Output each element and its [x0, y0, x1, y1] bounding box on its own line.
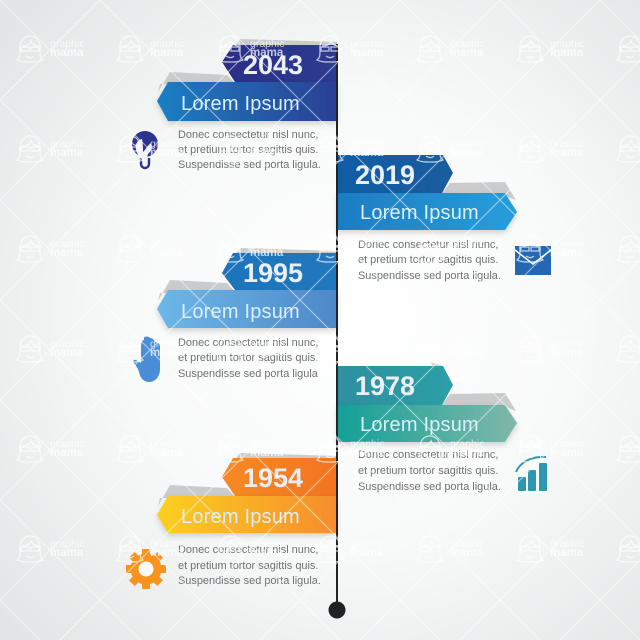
body text	[358, 449, 501, 493]
watermark overlay: graphic	[350, 338, 384, 350]
watermark overlay: mama	[450, 547, 484, 559]
year tab 2019	[337, 155, 453, 193]
watermark overlay: graphic	[350, 438, 384, 450]
watermark overlay: graphic	[550, 438, 584, 450]
icon: gear	[126, 549, 166, 589]
label bar	[157, 82, 337, 121]
body text: et pretium tortor sagittis quis.	[358, 465, 498, 477]
watermark overlay: graphic	[50, 38, 84, 50]
icon: bar chart	[516, 457, 547, 491]
label bar	[157, 290, 337, 328]
watermark overlay: graphic	[550, 238, 584, 250]
watermark overlay: graphic	[550, 338, 584, 350]
watermark overlay: mama	[350, 147, 384, 159]
watermark overlay: mama	[450, 47, 484, 59]
label: Lorem Ipsum	[360, 202, 479, 224]
watermark overlay: mama	[50, 47, 84, 59]
body text: Suspendisse sed porta ligula.	[178, 159, 321, 171]
watermark overlay: mama	[50, 247, 84, 259]
watermark overlay: graphic	[150, 38, 184, 50]
gray top edge	[430, 362, 453, 385]
body text: Suspendisse sed porta ligula.	[178, 575, 321, 587]
watermark overlay: mama	[150, 547, 184, 559]
year: 1978	[355, 371, 415, 401]
watermark overlay: mama	[150, 47, 184, 59]
watermark overlay: mama	[450, 147, 484, 159]
watermark overlay: graphic	[250, 538, 284, 550]
axis line	[336, 44, 338, 610]
body text: et pretium tortor sagittis quis.	[178, 352, 318, 364]
body text: Suspendisse sed porta ligula.	[358, 270, 501, 282]
label: Lorem Ipsum	[181, 301, 300, 323]
watermark overlay: mama	[250, 147, 284, 159]
label bar	[337, 405, 517, 442]
watermark overlay: mama	[150, 147, 184, 159]
watermark overlay: graphic	[50, 238, 84, 250]
watermark overlay: graphic	[350, 38, 384, 50]
watermark overlay: graphic	[450, 338, 484, 350]
watermark overlay: mama	[350, 447, 384, 459]
body text: Donec consectetur nisl nunc,	[358, 449, 498, 461]
icon: envelope	[515, 246, 551, 275]
watermark overlay: graphic	[50, 438, 84, 450]
watermark overlay: graphic	[150, 138, 184, 150]
watermark overlay: mama	[450, 247, 484, 259]
timeline entry: 2019	[337, 155, 551, 282]
year tab 2043	[222, 45, 337, 82]
watermark overlay: graphic	[150, 238, 184, 250]
watermark overlay: mama	[550, 247, 584, 259]
watermark overlay: graphic	[350, 238, 384, 250]
body text: Suspendisse sed porta ligula	[178, 368, 319, 380]
watermark overlay: mama	[150, 247, 184, 259]
watermark overlay: mama	[250, 247, 284, 259]
year: 1995	[243, 258, 303, 288]
watermark overlay: mama	[150, 347, 184, 359]
watermark overlay: mama	[350, 547, 384, 559]
body text: Donec consectetur nisl nunc,	[178, 337, 318, 349]
watermark overlay: mama	[450, 447, 484, 459]
watermark overlay: graphic	[150, 538, 184, 550]
watermark overlay: graphic	[550, 38, 584, 50]
watermark overlay: mama	[550, 47, 584, 59]
label: Lorem Ipsum	[181, 506, 300, 528]
body text: Donec consectetur nisl nunc,	[178, 544, 318, 556]
body text	[178, 129, 321, 171]
year: 2019	[355, 160, 415, 190]
watermark overlay: graphic	[250, 238, 284, 250]
watermark overlay: graphic	[450, 438, 484, 450]
watermark overlay: mama	[50, 347, 84, 359]
timeline entry: 1978	[337, 362, 547, 493]
gray backing shape	[442, 393, 516, 411]
watermark overlay: mama	[550, 547, 584, 559]
year tab 1954	[222, 458, 337, 496]
body text: Donec consectetur nisl nunc,	[178, 129, 318, 141]
icon: hand	[133, 336, 160, 382]
watermark overlay: graphic	[450, 538, 484, 550]
gray backing shapes	[158, 39, 337, 92]
watermark overlay: mama	[50, 547, 84, 559]
watermark overlay: mama	[550, 147, 584, 159]
timeline axis	[328, 44, 346, 618]
watermark overlay: mama	[150, 447, 184, 459]
label: Lorem Ipsum	[360, 414, 479, 436]
watermark overlay: mama	[250, 547, 284, 559]
watermark overlay: graphic	[250, 138, 284, 150]
body text: Donec consectetur nisl nunc,	[358, 239, 498, 251]
timeline entry: 1995	[133, 248, 337, 382]
watermark overlay: mama	[250, 447, 284, 459]
year tab 1995	[222, 253, 337, 290]
watermark overlay: mama	[550, 447, 584, 459]
watermark overlay: graphic	[350, 538, 384, 550]
watermark overlay: mama	[350, 47, 384, 59]
body text	[178, 337, 319, 380]
body text: et pretium tortor sagittis quis.	[178, 560, 318, 572]
timeline entry: 2043	[132, 39, 337, 171]
year: 2043	[243, 50, 303, 80]
watermark overlay: graphic	[250, 38, 284, 50]
watermark overlay: graphic	[450, 238, 484, 250]
gray backing shape	[442, 182, 516, 200]
watermark overlay: mama	[50, 147, 84, 159]
watermark overlay: graphic	[50, 538, 84, 550]
watermark overlay: graphic	[50, 138, 84, 150]
watermark overlay: graphic	[250, 438, 284, 450]
watermark overlay: graphic	[150, 338, 184, 350]
year tab 1978	[337, 366, 453, 405]
label bar	[337, 193, 517, 230]
watermark overlay: mama	[550, 347, 584, 359]
watermark overlay: mama	[50, 447, 84, 459]
watermark overlay: graphic	[550, 538, 584, 550]
watermark overlay: mama	[350, 247, 384, 259]
timeline entry: 1954	[126, 453, 337, 589]
label: Lorem Ipsum	[181, 93, 300, 115]
gray backing shapes	[158, 248, 337, 301]
label bar	[157, 496, 337, 533]
watermark overlay: mama	[250, 347, 284, 359]
watermark overlay: graphic	[550, 138, 584, 150]
body text	[178, 544, 321, 587]
year: 1954	[243, 463, 303, 493]
watermark overlay: graphic	[350, 138, 384, 150]
body text	[358, 239, 501, 282]
watermark overlay: mama	[350, 347, 384, 359]
gray backing shapes	[158, 453, 337, 506]
watermark overlay: graphic	[50, 338, 84, 350]
axis end dot	[328, 602, 346, 618]
watermark overlay: graphic	[450, 38, 484, 50]
icon: light bulb	[132, 131, 158, 168]
watermark overlay: graphic	[150, 438, 184, 450]
body text: et pretium tortor sagittis quis.	[178, 144, 318, 156]
watermark overlay: mama	[450, 347, 484, 359]
body text: Suspendisse sed porta ligula.	[358, 481, 501, 493]
watermark overlay: graphic	[450, 138, 484, 150]
watermark overlay: mama	[250, 47, 284, 59]
watermark overlay: graphic	[250, 338, 284, 350]
body text: et pretium tortor sagittis quis.	[358, 254, 498, 266]
